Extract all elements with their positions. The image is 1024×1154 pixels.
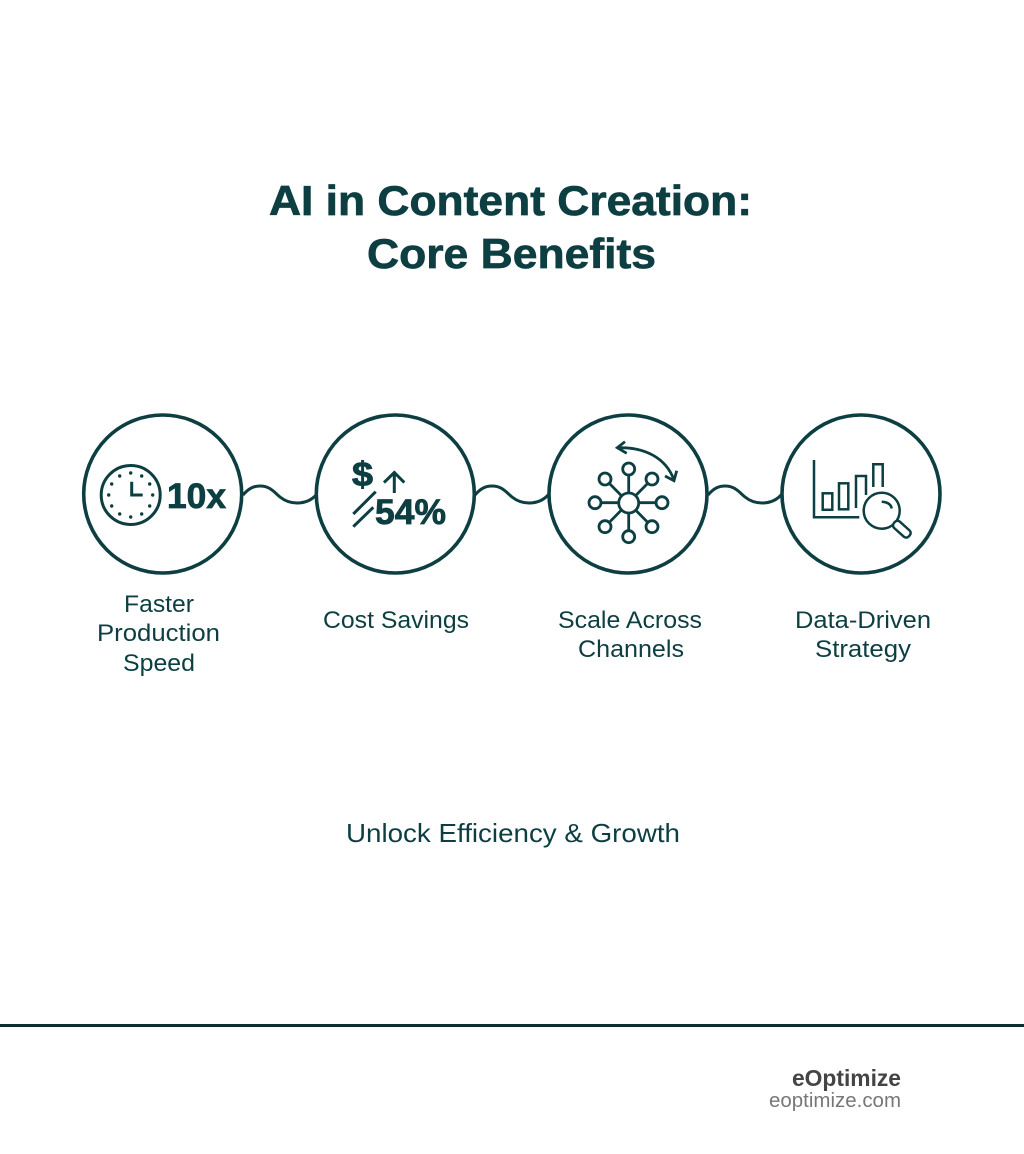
- footer brand: eOptimize: [792, 1065, 901, 1091]
- label: scale across channels: [558, 607, 702, 663]
- circle: cost: [316, 415, 474, 573]
- connector: cost to scale: [475, 486, 549, 503]
- label: faster production speed: [97, 591, 220, 677]
- footer brand: eoptimize.com: [769, 1090, 901, 1112]
- label: data-driven strategy: [795, 607, 931, 663]
- title: AI in Content Creation:: [269, 177, 752, 224]
- label: data-driven strategy: Data-Driven: [795, 607, 931, 634]
- panel: scale across channels: [549, 415, 707, 663]
- footer brand: [769, 1065, 901, 1112]
- panel: faster production speed: [84, 415, 242, 677]
- stat: 54%: 54%: [375, 493, 446, 532]
- icon: dollar with arrow and slashes: [352, 456, 404, 527]
- icon: bar chart: [814, 460, 883, 517]
- circle: scale: [549, 415, 707, 573]
- icon: curved double arrow: [617, 442, 677, 481]
- label: faster production speed: Production: [97, 620, 220, 647]
- label: faster production speed: Speed: [123, 650, 195, 677]
- circle: data: [782, 415, 940, 573]
- icon: network hub: [589, 463, 668, 543]
- label: cost savings: Cost Savings: [323, 607, 469, 634]
- label: scale across channels: Channels: [578, 636, 684, 663]
- title: Core Benefits: [367, 230, 656, 277]
- icon: dollar with arrow and slashes: $: [352, 456, 373, 494]
- stat: 10x: 10x: [167, 477, 227, 516]
- label: data-driven strategy: Strategy: [815, 636, 911, 663]
- connector: speed to cost: [243, 486, 317, 503]
- tagline: Unlock Efficiency & Growth: [346, 818, 680, 848]
- label: scale across channels: Scale Across: [558, 607, 702, 634]
- circle: speed: [84, 415, 242, 573]
- connector: scale to data: [708, 486, 782, 503]
- icon: clock: [101, 466, 160, 524]
- icon: magnifier: [864, 493, 912, 539]
- footer rule: [0, 1024, 1024, 1027]
- panel: cost savings: [316, 415, 474, 634]
- label: faster production speed: Faster: [124, 591, 194, 618]
- title: [269, 177, 752, 277]
- panel: data-driven strategy: [782, 415, 940, 663]
